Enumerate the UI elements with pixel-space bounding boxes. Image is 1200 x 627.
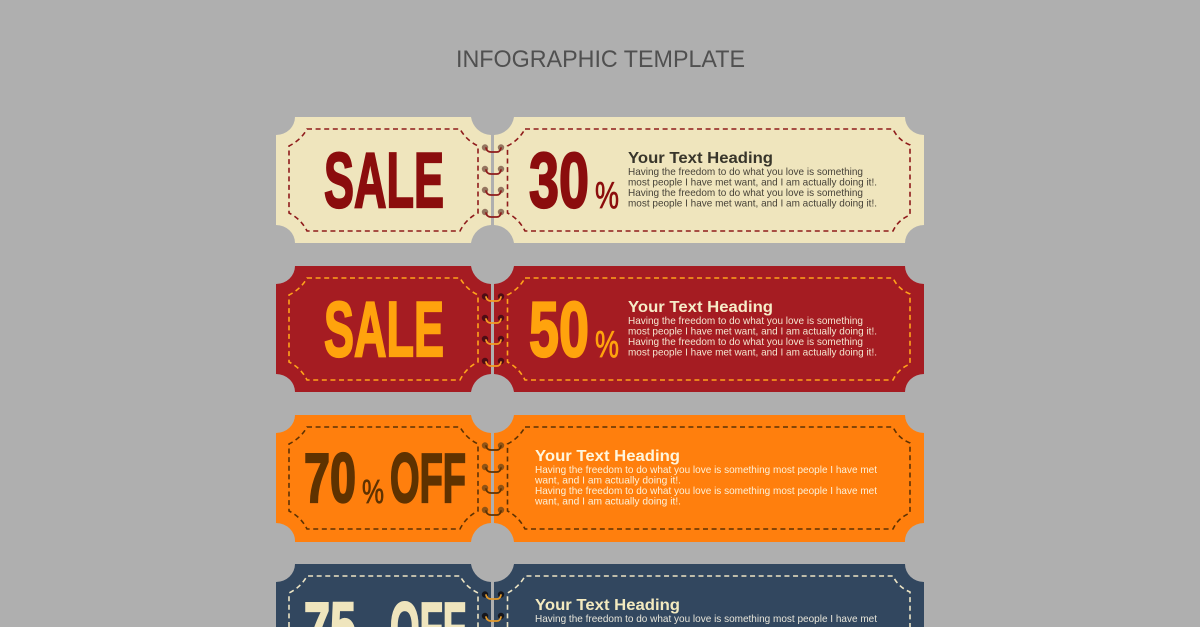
binding rings [482, 442, 504, 515]
text block: Having the freedom to do what you love is something most people I have met [535, 486, 877, 497]
text block: want, and I am actually doing it!. [534, 496, 681, 508]
number 70: 70 [304, 439, 356, 517]
number 30: 30 [529, 136, 589, 224]
text block: most people I have met want, and I am actually doing it!. [628, 178, 877, 188]
right dashed border [508, 427, 910, 529]
ticket 3: orange 70% off [276, 415, 924, 542]
left dashed border [289, 427, 478, 529]
right stub shape [494, 415, 924, 542]
text block: Your Text Heading [535, 597, 680, 614]
right stub shape [494, 117, 924, 243]
text block: most people I have met want, and I am actually doing it!. [628, 326, 877, 338]
left dashed border [289, 129, 478, 231]
label SALE: SALE [324, 136, 444, 224]
left stub shape [276, 266, 491, 392]
text block [535, 597, 877, 625]
title: INFOGRAPHIC TEMPLATE [456, 46, 745, 73]
ticket 1: cream sale 30% [276, 117, 924, 243]
right stub shape [494, 564, 924, 627]
binding rings [482, 293, 504, 366]
percent sign: % [362, 473, 384, 510]
percent sign: % [595, 175, 619, 217]
left dashed border [289, 278, 478, 380]
text block: Having the freedom to do what you love is something [628, 167, 863, 178]
text block: Your Text Heading [535, 448, 680, 465]
left stub shape [276, 415, 491, 542]
left stub shape [276, 117, 491, 243]
ticket 2: red sale 50% [276, 266, 924, 392]
right dashed border [508, 129, 910, 231]
text block: most people I have met want, and I am actually doing it!. [628, 348, 877, 358]
text block: Having the freedom to do what you love is something most people I have met [535, 614, 877, 625]
ticket 4: navy 75% off, cropped by the page edge [276, 564, 924, 627]
text block [628, 299, 877, 358]
text block: most people I have met want, and I am actually doing it!. [628, 198, 877, 210]
text block: Having the freedom to do what you love is something most people I have met [535, 465, 877, 476]
label OFF: OFF [390, 439, 466, 517]
right dashed border [508, 576, 910, 627]
label SALE: SALE [324, 285, 444, 373]
text block: want, and I am actually doing it!. [534, 476, 681, 486]
number 50: 50 [529, 285, 589, 373]
left stub shape [276, 564, 491, 627]
right stub shape [494, 266, 924, 392]
binding rings [482, 591, 504, 621]
text block [534, 448, 877, 508]
percent sign: % [595, 324, 619, 366]
right dashed border [508, 278, 910, 380]
text block [628, 150, 877, 210]
text block: Having the freedom to do what you love is something [628, 316, 863, 327]
text block: Your Text Heading [628, 299, 773, 316]
text block: Your Text Heading [628, 150, 773, 167]
text block: Having the freedom to do what you love is something [628, 188, 863, 199]
binding rings [482, 144, 504, 217]
left dashed border [289, 576, 478, 627]
text block: Having the freedom to do what you love is something [628, 337, 863, 348]
